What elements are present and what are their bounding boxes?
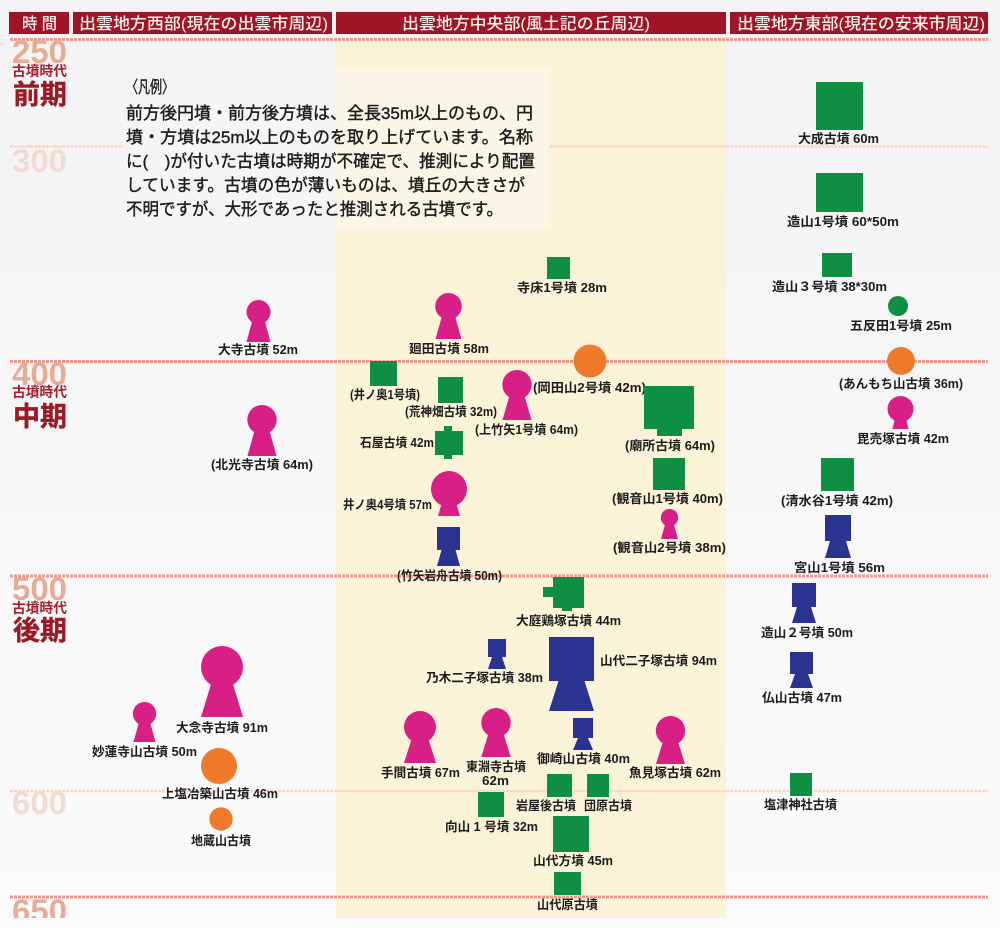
header: time: 時 間 [22, 15, 57, 33]
mound: 造山2号墳: 造山２号墳 50m [761, 625, 853, 640]
header: east: 出雲地方東部(現在の安来市周辺) [737, 15, 985, 33]
mound: 五反田1号墳 [850, 296, 952, 333]
mound: 地蔵山古墳: 地蔵山古墳 [191, 833, 251, 848]
mound: あんもち山古墳: (あんもち山古墳 36m) [839, 376, 963, 391]
period: early [12, 63, 67, 110]
period: late: 後期 [13, 616, 67, 646]
mound: 荒神畑古墳: (荒神畑古墳 32m) [405, 404, 497, 419]
mound: 山代方墳 [533, 816, 613, 868]
mound: 乃木二子塚古墳 [426, 639, 543, 685]
mound: 荒神畑古墳 [405, 377, 497, 419]
panel: east mounds [761, 82, 963, 812]
mound: 石屋古墳 [360, 426, 463, 459]
mound: 大念寺古墳: 大念寺古墳 91m [176, 720, 268, 735]
year 600: 600 [12, 785, 67, 821]
mound: 竹矢岩舟古墳 [397, 527, 502, 583]
mound: 廻田古墳: 廻田古墳 58m [409, 341, 489, 356]
panel: central region background [336, 40, 726, 918]
mound: 北光寺古墳 [211, 405, 313, 472]
period: middle [12, 384, 67, 432]
mound: 上竹矢1号墳: (上竹矢1号墳 64m) [475, 422, 578, 437]
mound: 魚見塚古墳 [629, 716, 721, 780]
mound: 清水谷1号墳: (清水谷1号墳 42m) [781, 493, 893, 508]
period: middle: 中期 [13, 402, 67, 432]
mound: 山代方墳: 山代方墳 45m [533, 853, 613, 868]
mound: 大成古墳: 大成古墳 60m [798, 131, 879, 146]
mound: 岡田山2号墳 [533, 344, 646, 395]
mound: 向山1号墳: 向山 1 号墳 32m [445, 819, 538, 834]
mound: 向山1号墳 [445, 792, 538, 834]
mound: 五反田1号墳: 五反田1号墳 25m [850, 318, 952, 333]
period: middle: 古墳時代 [12, 384, 67, 400]
mound: 大成古墳 [798, 82, 879, 146]
mound: 妙蓮寺山古墳: 妙蓮寺山古墳 50m [92, 744, 197, 759]
mound: 大庭鶏塚古墳 [516, 577, 621, 628]
mound: 手間古墳: 手間古墳 67m [381, 765, 460, 780]
panel: west mounds [92, 300, 313, 848]
mound: 乃木二子塚古墳: 乃木二子塚古墳 38m [426, 670, 543, 685]
mound: 岩屋後古墳 [516, 774, 576, 813]
mound: 井ノ奥1号墳: (井ノ奥1号墳) [350, 387, 420, 402]
mound: 寺床1号墳: 寺床1号墳 28m [517, 280, 607, 295]
mound: 塩津神社古墳: 塩津神社古墳 [764, 797, 837, 812]
mound: 大念寺古墳 [176, 646, 268, 735]
mound: 観音山2号墳: (観音山2号墳 38m) [613, 540, 726, 555]
mound: 東淵寺古墳: 東淵寺古墳 [466, 759, 526, 774]
mound: 井ノ奥4号墳 [343, 471, 467, 516]
mound: 団原古墳: 団原古墳 [584, 798, 632, 813]
mound: 寺床1号墳 [517, 257, 607, 295]
mound: 井ノ奥1号墳 [350, 361, 420, 402]
mound: 仏山古墳 [762, 652, 842, 705]
time axis: years and periods [12, 34, 67, 928]
header: time [9, 12, 69, 34]
mound: 観音山1号墳 [612, 458, 723, 506]
period: early: 古墳時代 [12, 63, 67, 79]
mound: 井ノ奥4号墳: 井ノ奥4号墳 57m [343, 497, 432, 512]
mound: 山代二子塚古墳: 山代二子塚古墳 94m [600, 653, 717, 668]
mound: 東淵寺古墳: 62m [482, 774, 509, 788]
mound: 仏山古墳: 仏山古墳 47m [762, 690, 842, 705]
mound: 観音山1号墳: (観音山1号墳 40m) [612, 491, 723, 506]
mound: 廻田古墳 [409, 293, 489, 356]
legend text block: 前方後円墳・前方後方墳は、全長35m以上のもの、円 [126, 104, 533, 123]
mound: 造山3号墳 [772, 253, 887, 294]
period: late [12, 600, 67, 646]
mound: 塩津神社古墳 [764, 773, 837, 812]
legend text block: に( )が付いた古墳は時期が不確定で、推測により配置 [126, 152, 535, 171]
mound: 東淵寺古墳 [466, 708, 526, 788]
panel: central mounds [343, 257, 726, 912]
legend text block: 墳・方墳は25m以上のものを取り上げています。名称 [126, 128, 533, 147]
header: central [336, 12, 726, 34]
mound: 妙蓮寺山古墳 [92, 702, 197, 759]
header: west: 出雲地方西部(現在の出雲市周辺) [79, 15, 328, 33]
mound: 石屋古墳: 石屋古墳 42m [360, 435, 434, 450]
mound: 毘売塚古墳 [857, 396, 949, 446]
mound: 大寺古墳 [218, 300, 298, 357]
mound: 宮山1号墳 [794, 515, 885, 575]
mound: 上塩冶築山古墳 [162, 748, 278, 801]
mound: 岡田山2号墳: (岡田山2号墳 42m) [533, 380, 646, 395]
mound: 廟所古墳 [625, 386, 715, 453]
mound: 地蔵山古墳 [191, 807, 251, 848]
mound: 手間古墳 [381, 711, 460, 780]
mound: 観音山2号墳 [613, 509, 726, 555]
mound: 造山3号墳: 造山３号墳 38*30m [772, 279, 887, 294]
header bar [9, 12, 988, 34]
mound: 山代二子塚古墳 [549, 637, 717, 711]
year 650: 650 [12, 893, 67, 928]
mound: 御崎山古墳 [537, 718, 630, 766]
mound: 岩屋後古墳: 岩屋後古墳 [516, 798, 576, 813]
mound: 北光寺古墳: (北光寺古墳 64m) [211, 457, 313, 472]
mound: 毘売塚古墳: 毘売塚古墳 42m [857, 431, 949, 446]
mound: 竹矢岩舟古墳: (竹矢岩舟古墳 50m) [397, 568, 502, 583]
legend text block: 〈凡例〉 [126, 78, 174, 97]
mound: 廟所古墳: (廟所古墳 64m) [625, 438, 715, 453]
period: early: 前期 [13, 80, 67, 110]
mound: 御崎山古墳: 御崎山古墳 40m [537, 751, 630, 766]
mound: 上塩冶築山古墳: 上塩冶築山古墳 46m [162, 786, 278, 801]
mound: 造山1号墳 [787, 173, 899, 229]
mound: 大寺古墳: 大寺古墳 52m [218, 342, 298, 357]
year 400: 400 [12, 356, 67, 392]
mound: 上竹矢1号墳 [475, 370, 578, 437]
mound: 団原古墳 [584, 774, 632, 813]
year 250: 250 [12, 34, 67, 70]
mound: 造山1号墳: 造山1号墳 60*50m [787, 214, 899, 229]
mound: 山代原古墳 [537, 872, 598, 912]
mound: 造山2号墳 [761, 583, 853, 640]
year 300: 300 [12, 143, 67, 179]
legend text block [123, 68, 550, 228]
mound: 山代原古墳: 山代原古墳 [537, 897, 598, 912]
legend text block: しています。古墳の色が薄いものは、墳丘の大きさが [126, 176, 525, 195]
header: central: 出雲地方中央部(風土記の丘周辺) [402, 15, 650, 33]
year 500: 500 [12, 571, 67, 607]
mound: あんもち山古墳 [839, 347, 963, 391]
mound: 大庭鶏塚古墳: 大庭鶏塚古墳 44m [516, 613, 621, 628]
mound: 宮山1号墳: 宮山1号墳 56m [794, 560, 885, 575]
legend text block: 不明ですが、大形であったと推測される古墳です。 [126, 200, 503, 219]
period: late: 古墳時代 [12, 600, 67, 616]
mound: 清水谷1号墳 [781, 458, 893, 508]
mound: 魚見塚古墳: 魚見塚古墳 62m [629, 765, 721, 780]
